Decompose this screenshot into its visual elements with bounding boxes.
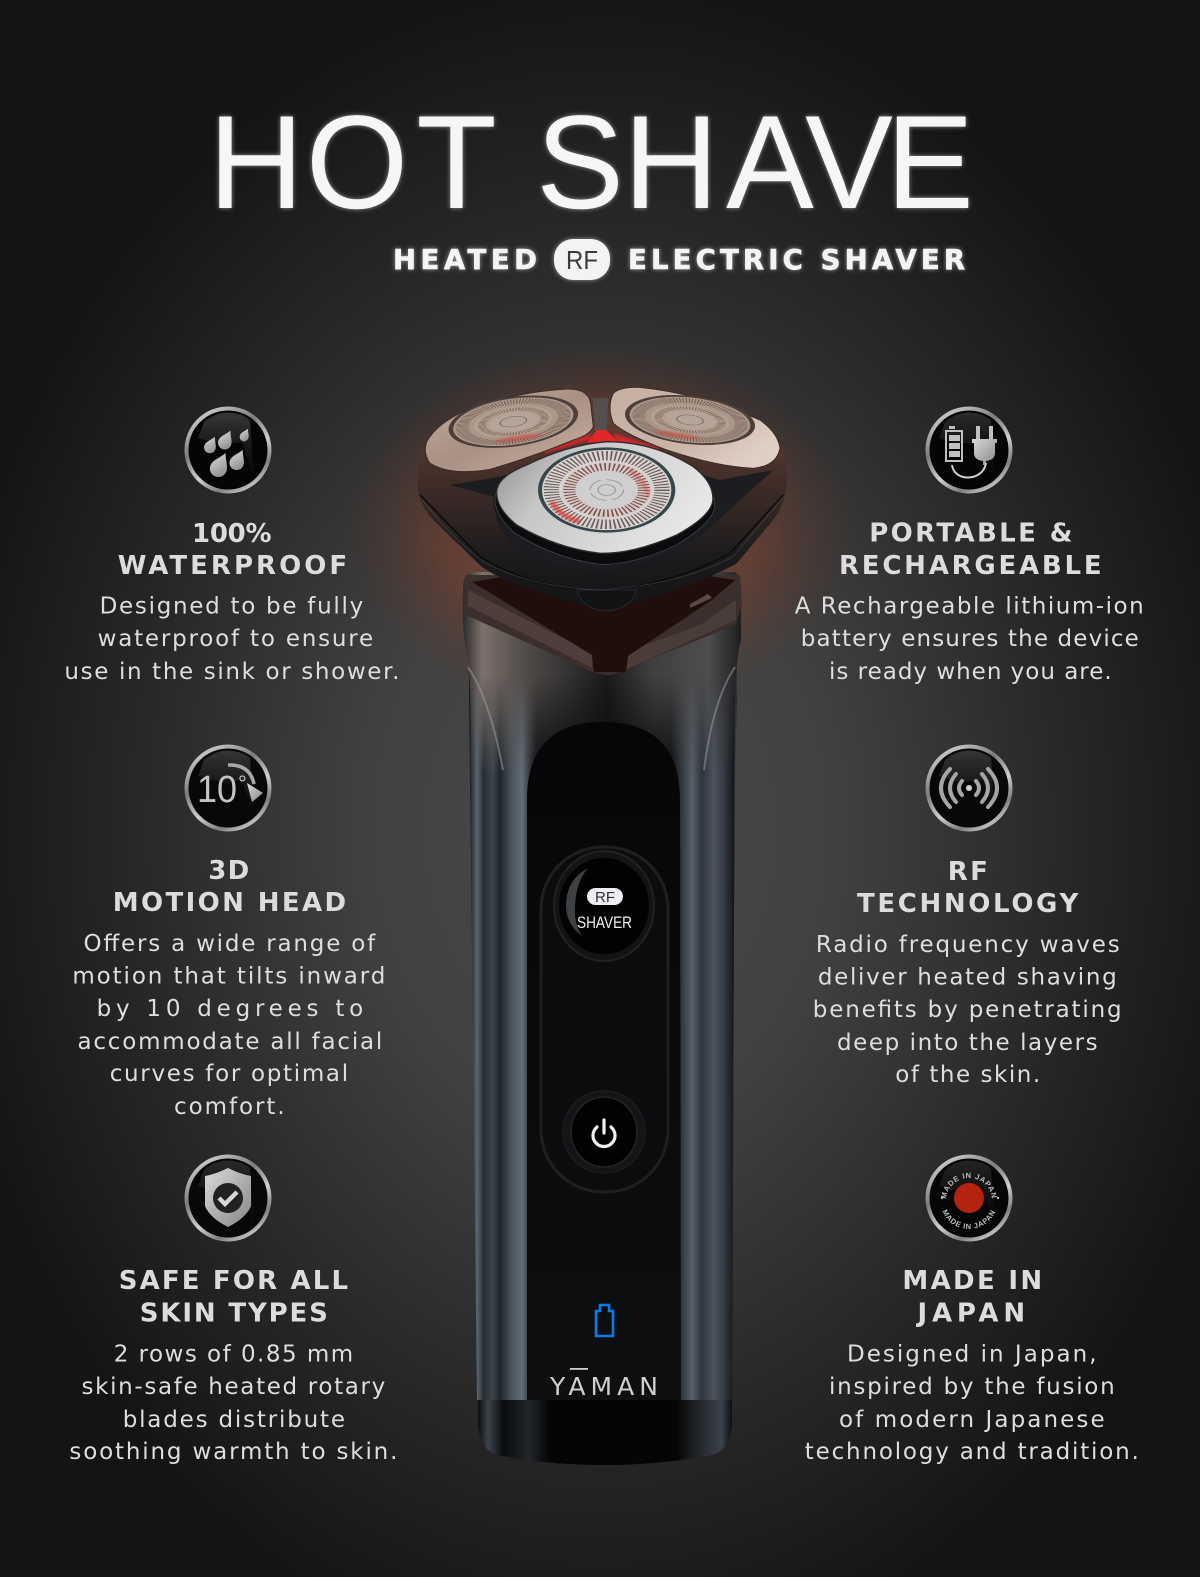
icon: made in Japan seal bbox=[926, 1154, 1012, 1242]
left shaving head bbox=[425, 388, 593, 472]
button pill bbox=[541, 847, 668, 1192]
RF shaver button: SHAVER bbox=[577, 913, 632, 932]
icon: battery and plug bbox=[926, 406, 1012, 494]
battery indicator bbox=[596, 1305, 613, 1336]
description: comfort. bbox=[174, 1094, 285, 1120]
control panel bbox=[527, 722, 681, 1407]
subtitle: ELECTRIC SHAVER bbox=[628, 244, 965, 276]
description: 2 rows of 0.85 mm bbox=[114, 1342, 353, 1368]
icon: ten degree tilt bbox=[184, 744, 272, 832]
feature: portable and rechargeable bbox=[795, 406, 1144, 685]
description: of modern Japanese bbox=[839, 1407, 1105, 1433]
icon: made in Japan seal: MADE IN JAPAN bbox=[941, 1172, 997, 1198]
description: benefits by penetrating bbox=[813, 997, 1122, 1023]
front shaving head bbox=[495, 442, 715, 564]
icon: water drops bbox=[184, 406, 272, 494]
shoulder band bbox=[462, 560, 742, 675]
description: Radio frequency waves bbox=[816, 932, 1120, 958]
description: deep into the layers bbox=[837, 1030, 1098, 1056]
icon: ten degree tilt: 10 bbox=[197, 769, 237, 811]
description: curves for optimal bbox=[110, 1061, 348, 1087]
heading: SAFE FOR ALL bbox=[119, 1266, 348, 1296]
description: of the skin. bbox=[895, 1062, 1040, 1088]
feature: made in Japan bbox=[805, 1154, 1139, 1465]
RF badge: RF bbox=[566, 245, 598, 275]
icon: made in Japan seal: MADE IN JAPAN bbox=[942, 1209, 996, 1229]
description bbox=[64, 594, 399, 685]
centre post bbox=[593, 398, 608, 432]
description: battery ensures the device bbox=[801, 626, 1139, 652]
heading: TECHNOLOGY bbox=[857, 889, 1079, 919]
description: technology and tradition. bbox=[805, 1439, 1139, 1465]
YAMAN logo: YAMAN bbox=[549, 1372, 658, 1401]
shaver bbox=[418, 387, 787, 1465]
icon: ten degree tilt: ° bbox=[238, 771, 247, 796]
description: by 10 degrees to bbox=[97, 996, 363, 1022]
feature: 3D motion head bbox=[72, 744, 385, 1120]
heading: RF bbox=[948, 857, 988, 887]
upper body bbox=[463, 572, 741, 780]
heading: JAPAN bbox=[916, 1298, 1025, 1328]
description: accommodate all facial bbox=[78, 1029, 382, 1055]
heading: 100% bbox=[192, 519, 272, 549]
heading bbox=[119, 1266, 348, 1328]
description: Designed to be fully bbox=[100, 594, 363, 620]
heading: RECHARGEABLE bbox=[839, 551, 1102, 581]
heading: MOTION HEAD bbox=[113, 888, 346, 918]
red light bbox=[537, 430, 660, 453]
heading bbox=[857, 857, 1079, 919]
heading: WATERPROOF bbox=[118, 551, 347, 581]
shaver body bbox=[469, 640, 735, 1400]
heading bbox=[902, 1266, 1042, 1328]
description bbox=[795, 594, 1144, 685]
description: skin-safe heated rotary bbox=[82, 1374, 385, 1400]
base bbox=[478, 1400, 732, 1465]
shaver head bbox=[418, 387, 787, 611]
icon: radio waves bbox=[926, 744, 1012, 832]
description: is ready when you are. bbox=[829, 659, 1112, 685]
heading: SKIN TYPES bbox=[140, 1298, 328, 1328]
heading bbox=[118, 519, 347, 581]
description: Designed in Japan, bbox=[847, 1342, 1096, 1368]
feature: RF technology bbox=[813, 744, 1122, 1088]
description: soothing warmth to skin. bbox=[69, 1439, 397, 1465]
feature: 100% waterproof bbox=[64, 406, 399, 685]
feature: safe for all skin types bbox=[69, 1154, 397, 1465]
description: inspired by the fusion bbox=[829, 1374, 1115, 1400]
heading bbox=[113, 856, 346, 918]
RF badge bbox=[554, 239, 610, 280]
description: motion that tilts inward bbox=[72, 964, 385, 990]
right shaving head bbox=[610, 387, 780, 468]
description: Offers a wide range of bbox=[84, 931, 376, 957]
RF shaver button: RF bbox=[595, 889, 615, 906]
description bbox=[69, 1342, 397, 1465]
description: blades distribute bbox=[123, 1407, 345, 1433]
icon: shield check bbox=[184, 1154, 272, 1242]
warm glow behind shaver head bbox=[345, 345, 855, 715]
rib highlights bbox=[468, 667, 735, 770]
subtitle: HEATED bbox=[393, 244, 537, 276]
description: waterproof to ensure bbox=[98, 626, 373, 652]
RF shaver button bbox=[554, 851, 654, 961]
description bbox=[72, 931, 385, 1120]
description: A Rechargeable lithium-ion bbox=[795, 594, 1144, 620]
heading bbox=[839, 518, 1102, 581]
description: use in the sink or shower. bbox=[64, 659, 399, 685]
heading: 3D bbox=[208, 856, 249, 886]
power button bbox=[563, 1091, 645, 1173]
description bbox=[813, 932, 1122, 1088]
head shell bbox=[418, 431, 787, 608]
title: HOT SHAVE bbox=[208, 88, 974, 237]
heading: PORTABLE & bbox=[869, 518, 1072, 548]
heading: MADE IN bbox=[902, 1266, 1042, 1296]
description bbox=[805, 1342, 1139, 1465]
subtitle bbox=[393, 239, 965, 280]
description: deliver heated shaving bbox=[818, 965, 1117, 991]
